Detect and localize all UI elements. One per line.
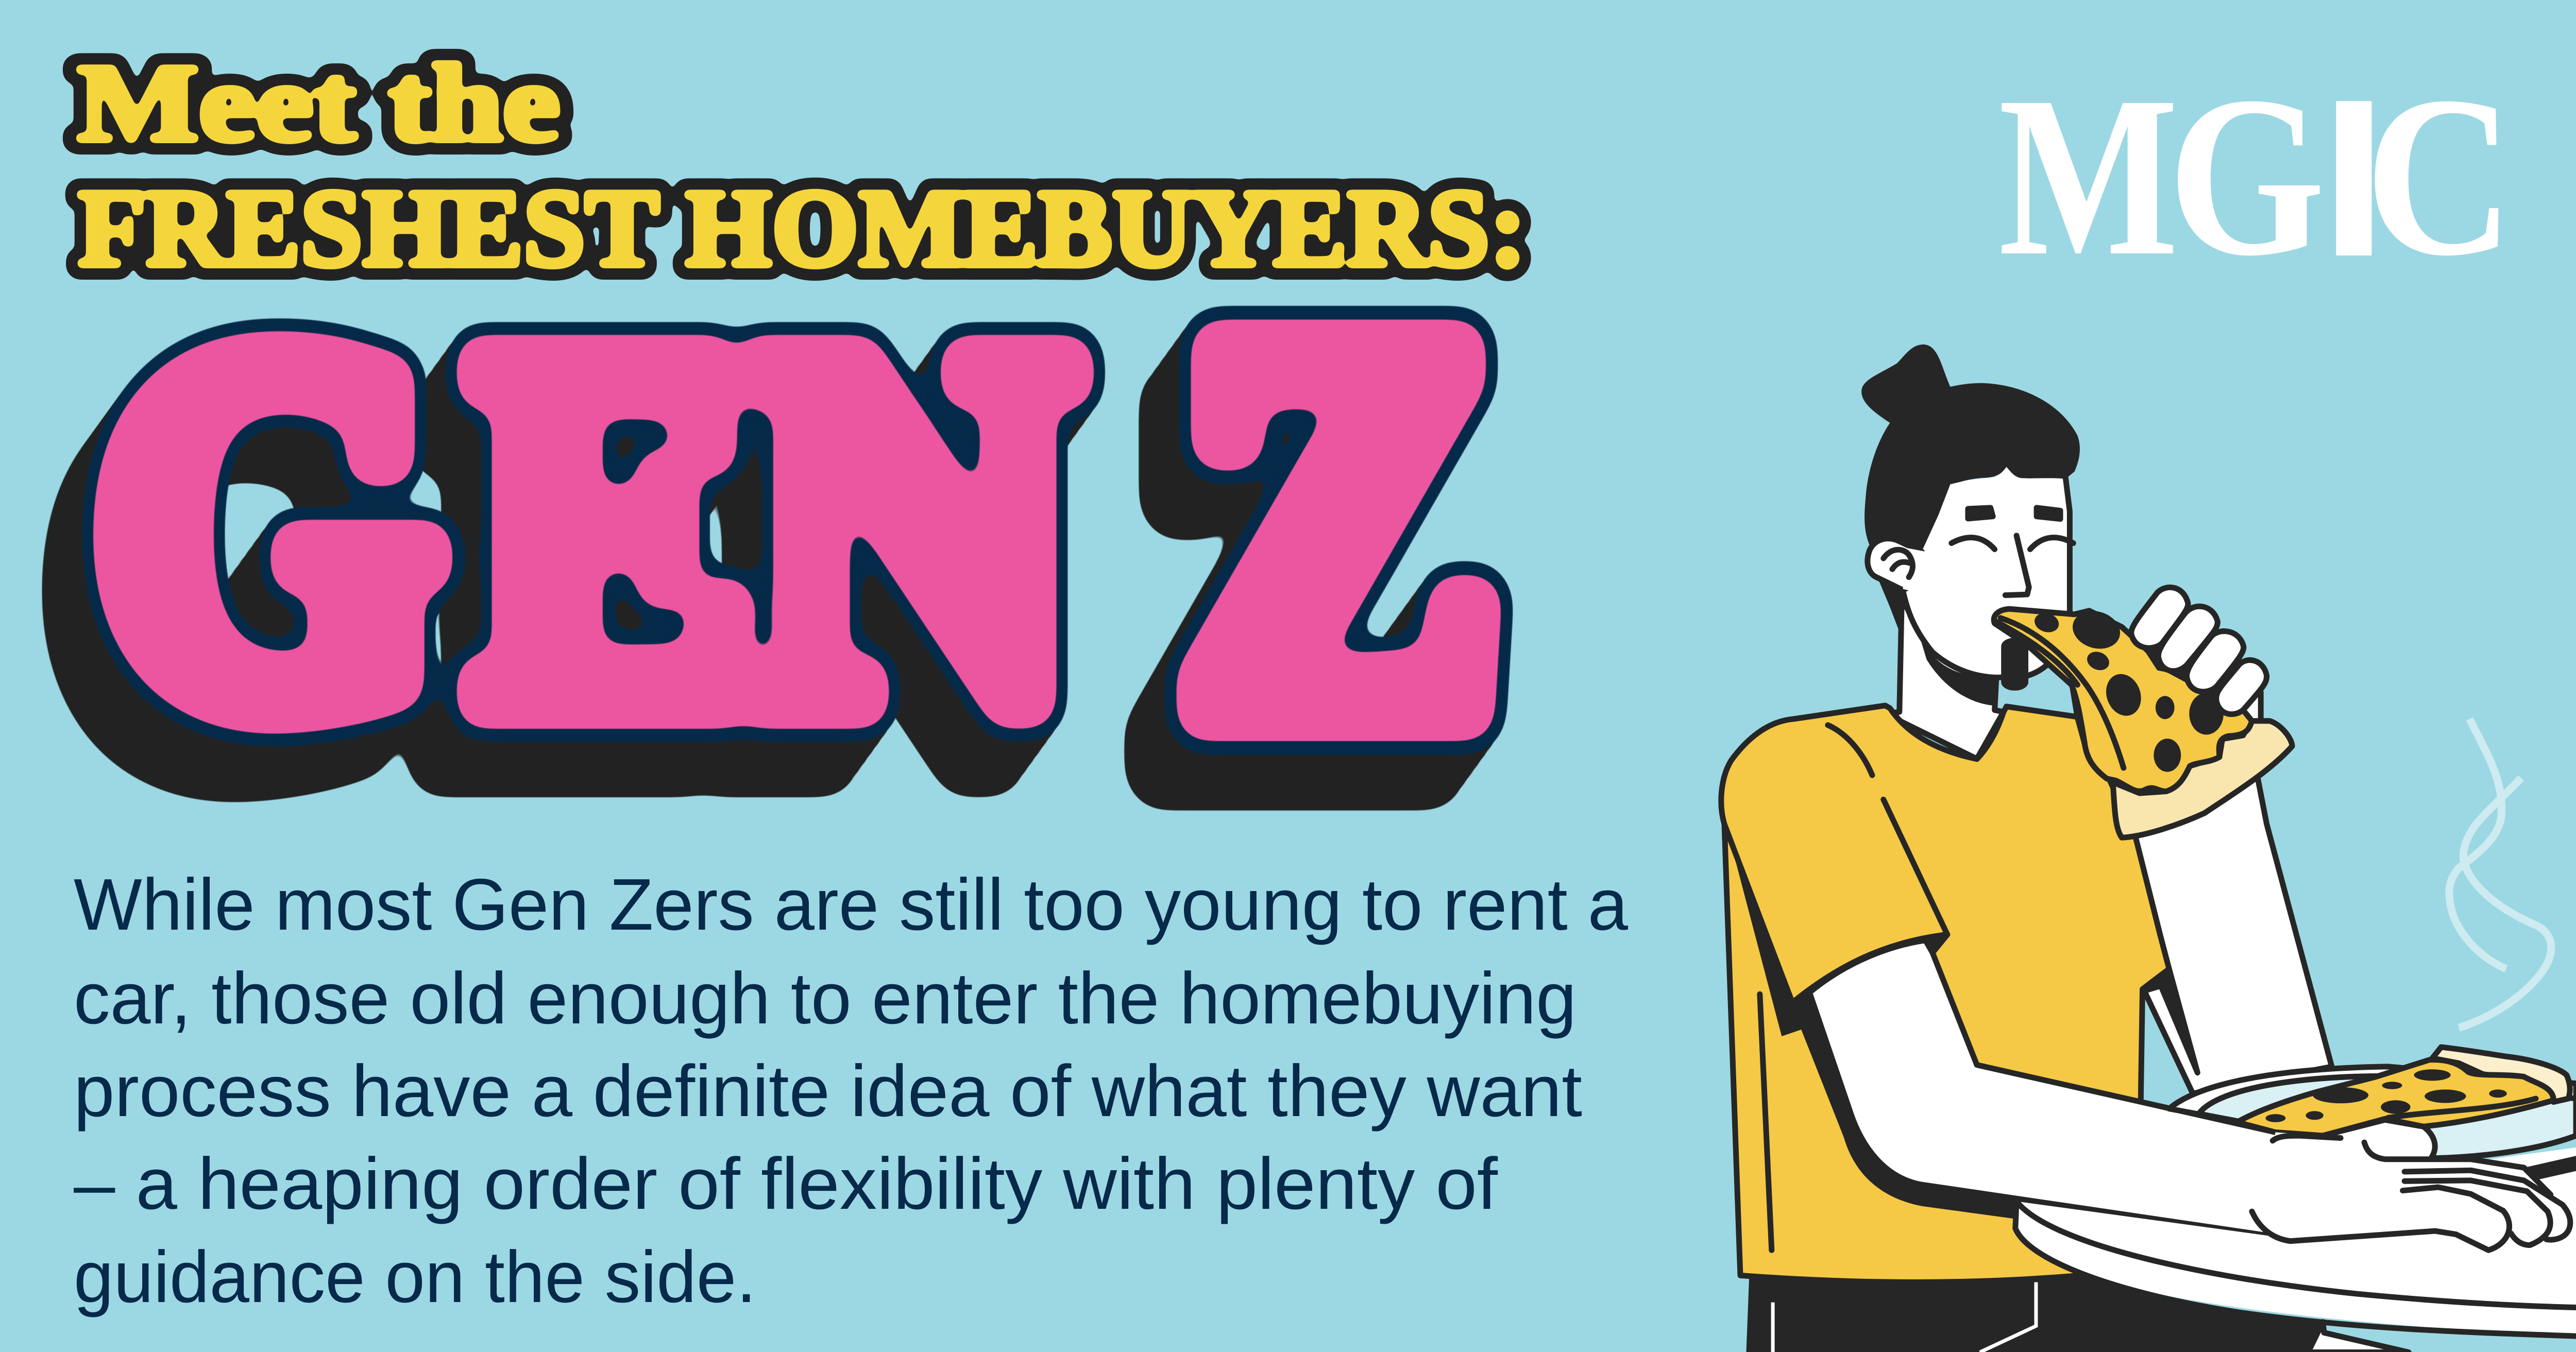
crust bbox=[2113, 721, 2292, 837]
headline navy outline bbox=[96, 220, 1499, 830]
title line 1: Meet the: Meet the bbox=[77, 41, 560, 164]
headline pink letters: E bbox=[472, 242, 753, 812]
closed eyes bbox=[1952, 538, 2073, 549]
headline black extruded shadow: G bbox=[96, 242, 440, 812]
body paragraph: car, those old enough to enter the homebuying bbox=[74, 957, 1577, 1039]
table bbox=[1746, 1148, 2576, 1352]
face bbox=[1903, 467, 2070, 678]
ear bbox=[1868, 539, 1922, 590]
white forearm sliver bbox=[2072, 685, 2116, 782]
four fingers bbox=[2131, 587, 2188, 648]
plate outer rim bbox=[2169, 1067, 2576, 1158]
pizza toppings bbox=[2265, 1069, 2507, 1122]
fingers bbox=[2252, 1170, 2570, 1250]
head bbox=[1861, 345, 2080, 691]
back arm bbox=[2073, 685, 2332, 1093]
headline: GEN Z bbox=[96, 220, 1499, 830]
near arm bbox=[1791, 940, 2565, 1245]
sideburn pill bbox=[2001, 638, 2028, 691]
body paragraph: – a heaping order of flexibility with plenty of bbox=[74, 1143, 1498, 1225]
headline pink letters: Z bbox=[1180, 220, 1499, 830]
illustration: person eating pizza bbox=[1721, 345, 2576, 1352]
logo: MGIC: G bbox=[2168, 49, 2325, 303]
toppings bbox=[2031, 608, 2224, 772]
eyebrows bbox=[1968, 508, 2060, 519]
title line 1: Meet the: Meet the bbox=[77, 41, 560, 164]
pizza slice being eaten bbox=[1994, 587, 2292, 837]
shirt fold lines bbox=[1760, 725, 1947, 1250]
headline navy outline: G bbox=[96, 242, 440, 812]
hair and bun bbox=[1861, 345, 2080, 551]
pizza slice bbox=[2237, 1060, 2553, 1136]
pizza crust bbox=[2432, 1047, 2570, 1102]
title line 2: FRESHEST HOMEBUYERS:: FRESHEST HOMEBUYERS: bbox=[78, 166, 1527, 289]
yellow t-shirt bbox=[1721, 706, 2169, 1282]
pizza slice bbox=[1994, 609, 2252, 792]
logo: MGIC: I bbox=[2324, 56, 2384, 300]
table base bbox=[2308, 1322, 2409, 1352]
pants bbox=[1746, 1275, 2323, 1352]
headline pink letters bbox=[96, 220, 1499, 830]
logo: MGIC bbox=[1998, 49, 2514, 303]
headline black extruded shadow: E bbox=[472, 242, 753, 812]
title: Meet the Freshest Homebuyers bbox=[77, 41, 1527, 289]
hand on table bbox=[2252, 1120, 2570, 1250]
title line 2: FRESHEST HOMEBUYERS:: FRESHEST HOMEBUYERS: bbox=[78, 166, 1527, 289]
pants seams bbox=[1773, 1282, 2036, 1352]
plate with pizza slice bbox=[2169, 1047, 2576, 1179]
headline black extruded shadow: Z bbox=[1180, 220, 1499, 830]
logo: MGIC: M bbox=[1998, 49, 2178, 303]
steam bbox=[2449, 719, 2551, 1028]
neck bbox=[1885, 598, 2004, 759]
headline black extruded shadow bbox=[96, 220, 1499, 830]
headline navy outline: E bbox=[472, 242, 753, 812]
under-jaw shade bbox=[1920, 636, 1997, 706]
headline pink letters: N bbox=[752, 242, 1075, 812]
plate shadow bbox=[2477, 1156, 2576, 1179]
finger shadow bbox=[2129, 627, 2240, 707]
headline navy outline: N bbox=[752, 242, 1075, 812]
body paragraph: While most Gen Zers are still too young to rent a bbox=[74, 864, 1628, 946]
headline pink letters: G bbox=[96, 242, 440, 812]
hair behind and neck bbox=[1876, 575, 2004, 759]
headline navy outline: Z bbox=[1180, 220, 1499, 830]
ear inner lines bbox=[1884, 550, 1912, 577]
body paragraph: guidance on the side. bbox=[74, 1236, 756, 1318]
back arm shade bbox=[2143, 969, 2197, 1073]
plate inner well bbox=[2199, 1076, 2576, 1158]
body paragraph: process have a definite idea of what they want bbox=[74, 1050, 1582, 1132]
sleeve shade bbox=[1728, 834, 1947, 1036]
nose bbox=[2005, 536, 2029, 595]
logo: MGIC: C bbox=[2365, 49, 2514, 303]
headline black extruded shadow: N bbox=[752, 242, 1075, 812]
body paragraph bbox=[74, 864, 1628, 1318]
